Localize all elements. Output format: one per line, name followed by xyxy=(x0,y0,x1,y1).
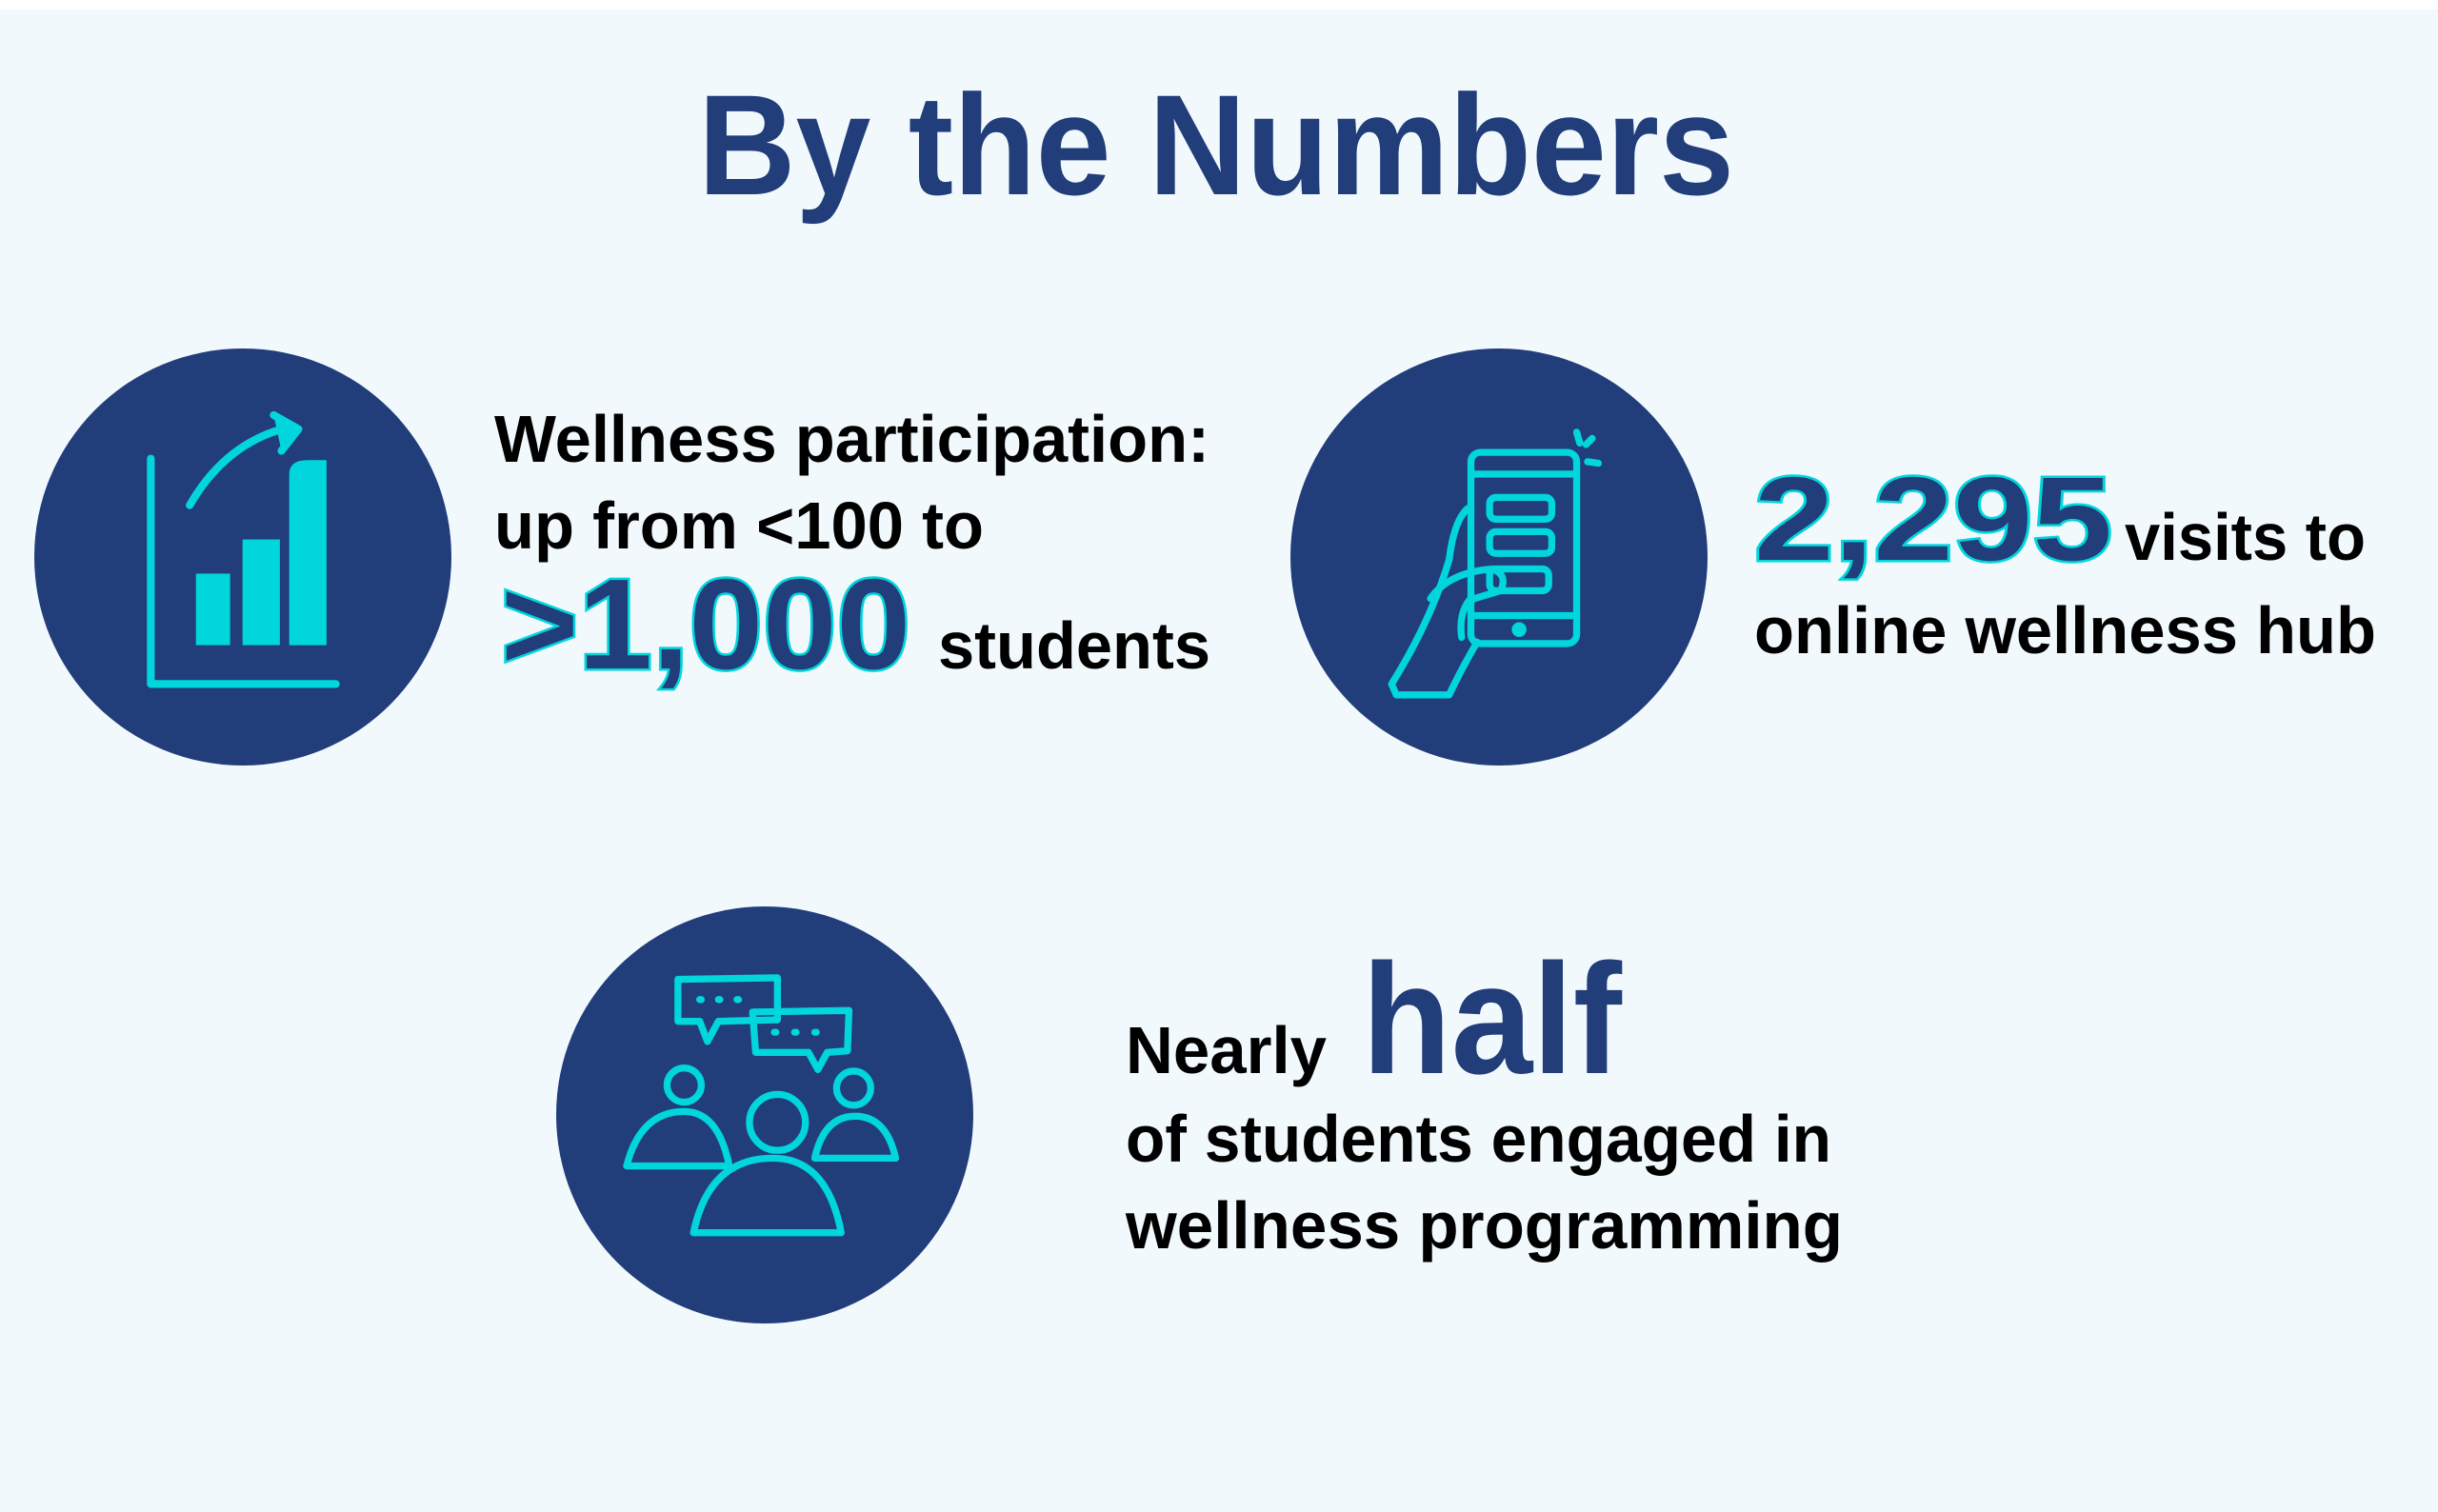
text: online hub: 2,295 xyxy=(1754,453,2112,586)
text: participation: >1,000 xyxy=(501,552,910,696)
icon: growth chart xyxy=(34,348,451,766)
panel: participation xyxy=(34,348,1210,766)
text: engagement xyxy=(1125,931,1843,1263)
panel: engagement xyxy=(556,906,1843,1323)
text: participation: up from <100 to xyxy=(494,488,984,563)
icon: phone in hand xyxy=(1290,348,1708,766)
icon: group conversation xyxy=(556,906,973,1323)
text: online hub xyxy=(1754,453,2376,667)
text: engagement: half xyxy=(1362,931,1623,1106)
text: participation xyxy=(494,402,1210,696)
text: participation: students xyxy=(938,608,1210,683)
text: engagement: Nearly xyxy=(1126,1013,1327,1087)
text: online hub: online wellness hub xyxy=(1754,593,2376,667)
text: engagement: of students engaged in xyxy=(1126,1102,1831,1176)
text: participation: Wellness participation: xyxy=(494,402,1209,476)
panel: online hub xyxy=(1290,348,2376,766)
text: online hub: visits to xyxy=(2125,500,2366,574)
title: By the Numbers xyxy=(698,65,1734,225)
text: engagement: wellness programming xyxy=(1125,1188,1843,1263)
